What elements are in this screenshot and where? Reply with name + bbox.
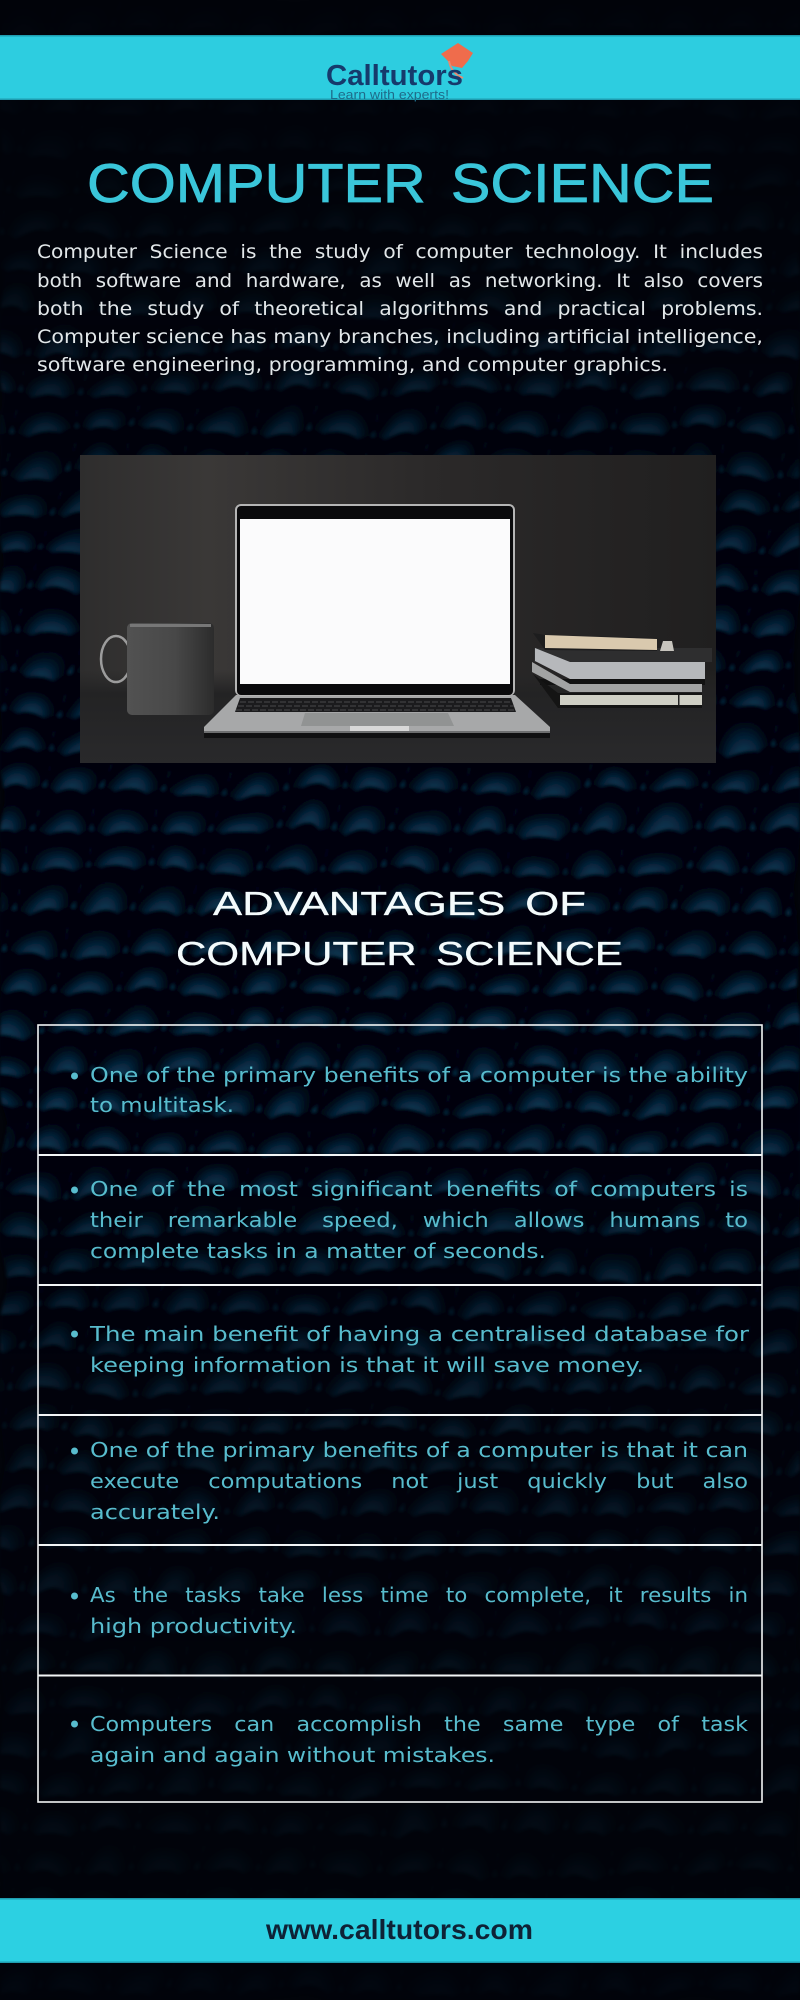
intro paragraph [37, 241, 763, 376]
icon: laptop [204, 504, 550, 738]
row 2: speed: complete tasks in a matter of seconds. [90, 1239, 546, 1263]
row 1: multitask: One of the primary benefits of a computer is the ability [90, 1063, 748, 1087]
row 1: multitask: to multitask. [90, 1093, 234, 1117]
intro paragraph: Computer science has many branches, including artificial intelligence, [37, 326, 763, 348]
row 4: accuracy: accurately. [90, 1500, 220, 1524]
row 5: productivity: high productivity. [90, 1614, 297, 1638]
intro paragraph: software engineering, programming, and computer graphics. [37, 354, 668, 376]
row 5: productivity [71, 1583, 748, 1638]
icon: stack of books [532, 633, 712, 708]
header band [0, 35, 800, 102]
row 2: speed: their remarkable speed, which allows humans to [90, 1208, 748, 1232]
section heading: COMPUTER SCIENCE [176, 935, 623, 972]
row 2: speed [71, 1177, 748, 1263]
footer band [0, 1898, 800, 1963]
row 6: repetition: Computers can accomplish the same type of task [90, 1712, 748, 1736]
section heading: ADVANTAGES OF [213, 885, 586, 922]
intro paragraph: Computer Science is the study of computer technology. It includes [37, 241, 763, 263]
row 4: accuracy: One of the primary benefits of a computer is that it can [90, 1438, 748, 1462]
intro paragraph: both the study of theoretical algorithms and practical problems. [37, 298, 763, 320]
footer url: www.calltutors.com [265, 1914, 533, 1945]
logo wordmark: Calltutors [326, 60, 463, 92]
advantages table [38, 1025, 762, 1802]
row 3: centralised database [71, 1322, 750, 1377]
logo tagline: Learn with experts! [330, 87, 449, 102]
row 3: centralised database: The main benefit of having a centralised database for [89, 1322, 750, 1346]
title: COMPUTER SCIENCE [87, 153, 714, 214]
intro paragraph: both software and hardware, as well as networking. It also covers [37, 270, 763, 292]
photo: laptop on desk with mug and books [80, 455, 716, 763]
row 4: accuracy: execute computations not just quickly but also [90, 1469, 748, 1493]
row 3: centralised database: keeping information is that it will save money. [90, 1353, 644, 1377]
row 6: repetition [71, 1712, 748, 1767]
row 6: repetition: again and again without mistakes. [90, 1743, 495, 1767]
section heading [176, 885, 623, 972]
row 4: accuracy [71, 1438, 748, 1524]
row 1: multitask [71, 1063, 748, 1117]
row 2: speed: One of the most significant benefits of computers is [90, 1177, 748, 1201]
icon: graduation cap logo [441, 43, 473, 78]
icon: coffee mug [101, 623, 214, 715]
row 5: productivity: As the tasks take less time to complete, it results in [90, 1583, 748, 1607]
